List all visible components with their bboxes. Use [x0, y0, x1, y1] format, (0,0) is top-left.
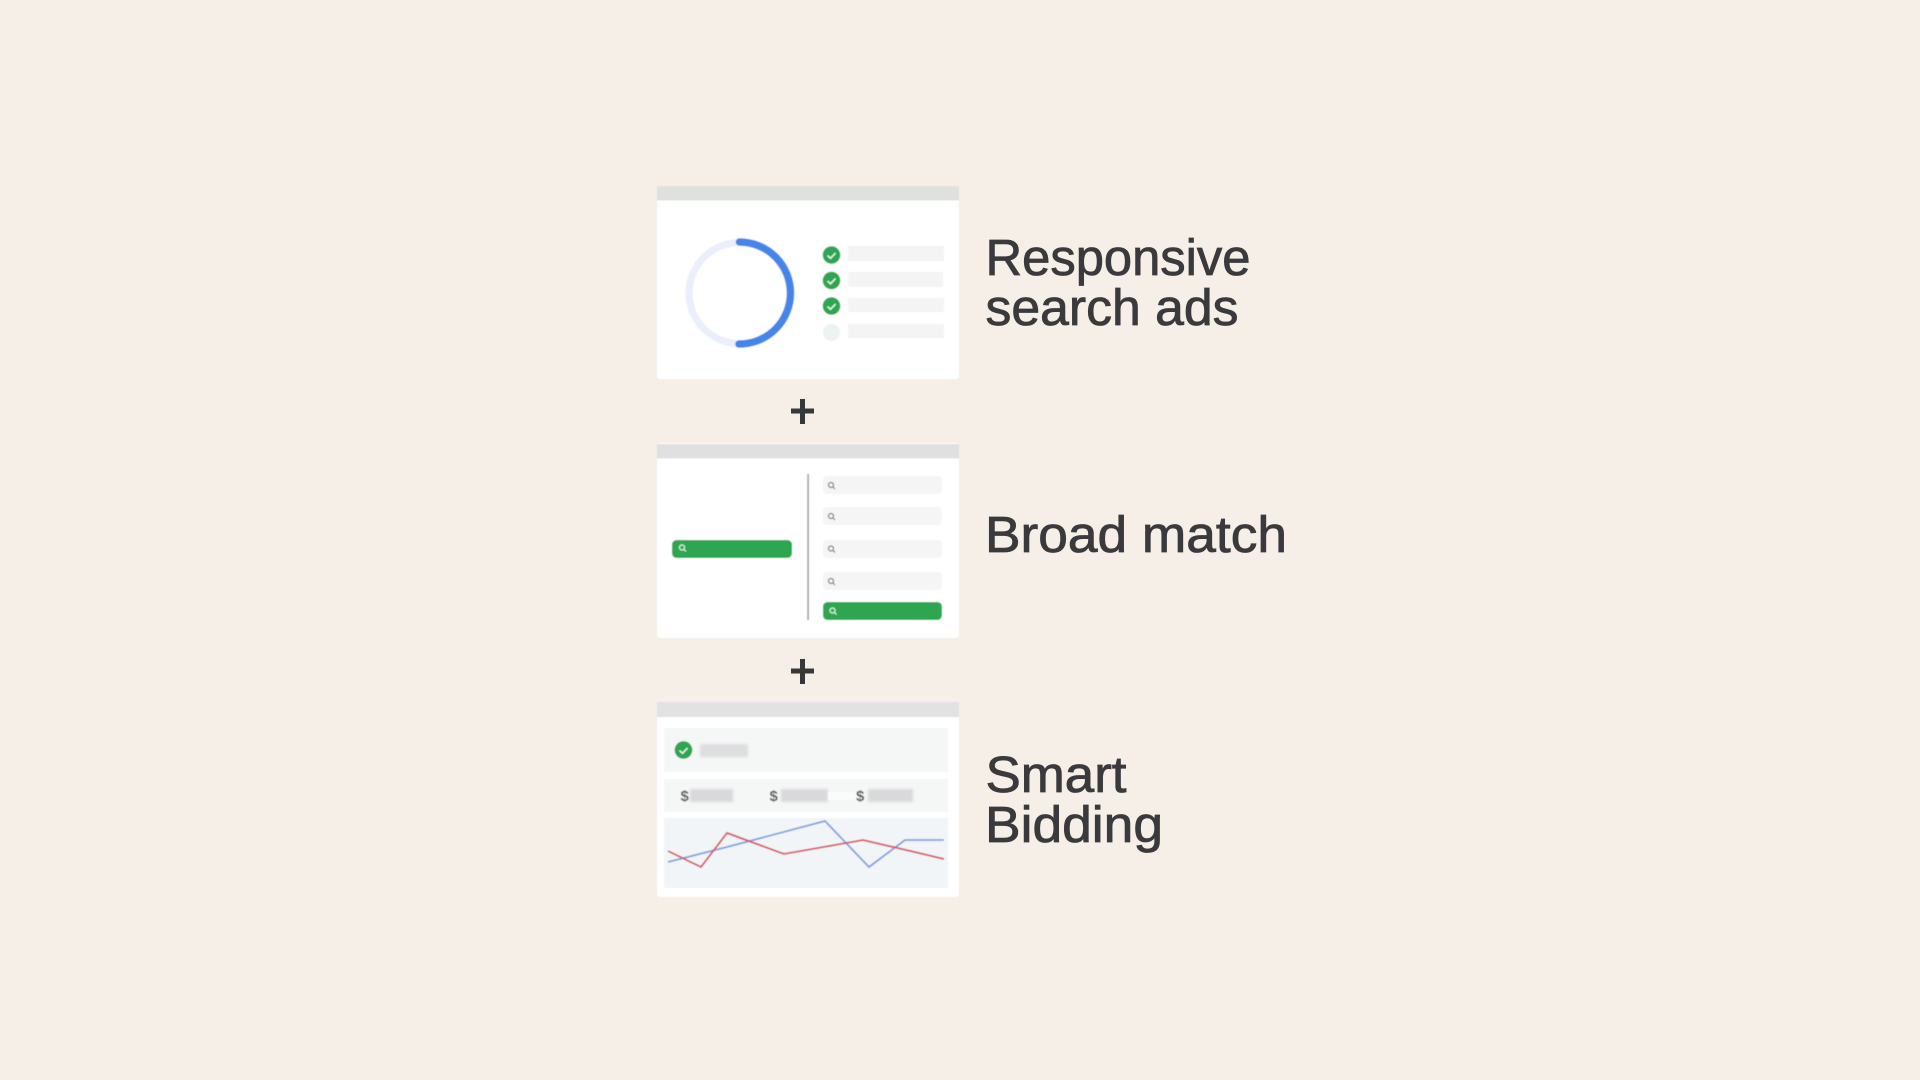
- checklist row 1: [823, 246, 944, 264]
- green search bar left: [672, 540, 792, 558]
- search row 2: [823, 507, 942, 525]
- heading: broad match: Broad match: [985, 506, 1287, 563]
- window title bar: [657, 186, 959, 200]
- red series: [668, 833, 944, 867]
- icon: plus one: [791, 399, 814, 424]
- vertical divider: [807, 474, 809, 620]
- blue series: [668, 821, 944, 867]
- green search row: [823, 602, 942, 620]
- ring progress arc: [739, 242, 790, 344]
- window title bar: [657, 702, 959, 717]
- search row 4: [823, 572, 942, 590]
- checklist row 3: [823, 297, 944, 315]
- metrics panel: $: [770, 788, 778, 805]
- metrics panel: [664, 779, 948, 812]
- heading: responsive search ads: search ads: [986, 279, 1238, 336]
- ring track: [689, 242, 790, 344]
- panel: broad match window: [657, 443, 959, 638]
- metrics panel: $: [856, 788, 865, 805]
- heading: responsive search ads: [986, 229, 1250, 336]
- panel: responsive search ads window: [657, 186, 959, 379]
- search row 1: [823, 476, 942, 494]
- checklist row 4 (pending): [823, 324, 944, 341]
- checklist row 2: [823, 272, 943, 289]
- metrics panel: $: [680, 788, 690, 805]
- window title bar: [657, 444, 959, 458]
- icon: plus two: [791, 659, 814, 684]
- window body: [657, 702, 959, 897]
- window body: [657, 443, 959, 638]
- heading: smart bidding: Bidding: [985, 796, 1163, 853]
- heading: smart bidding: [985, 746, 1163, 853]
- line chart: [664, 818, 948, 888]
- status panel: [664, 728, 948, 772]
- heading: smart bidding: Smart: [986, 746, 1126, 803]
- panel: smart bidding window: [657, 702, 959, 897]
- search row 3: [823, 540, 942, 558]
- heading: responsive search ads: Responsive: [986, 229, 1250, 286]
- window body: [657, 186, 959, 379]
